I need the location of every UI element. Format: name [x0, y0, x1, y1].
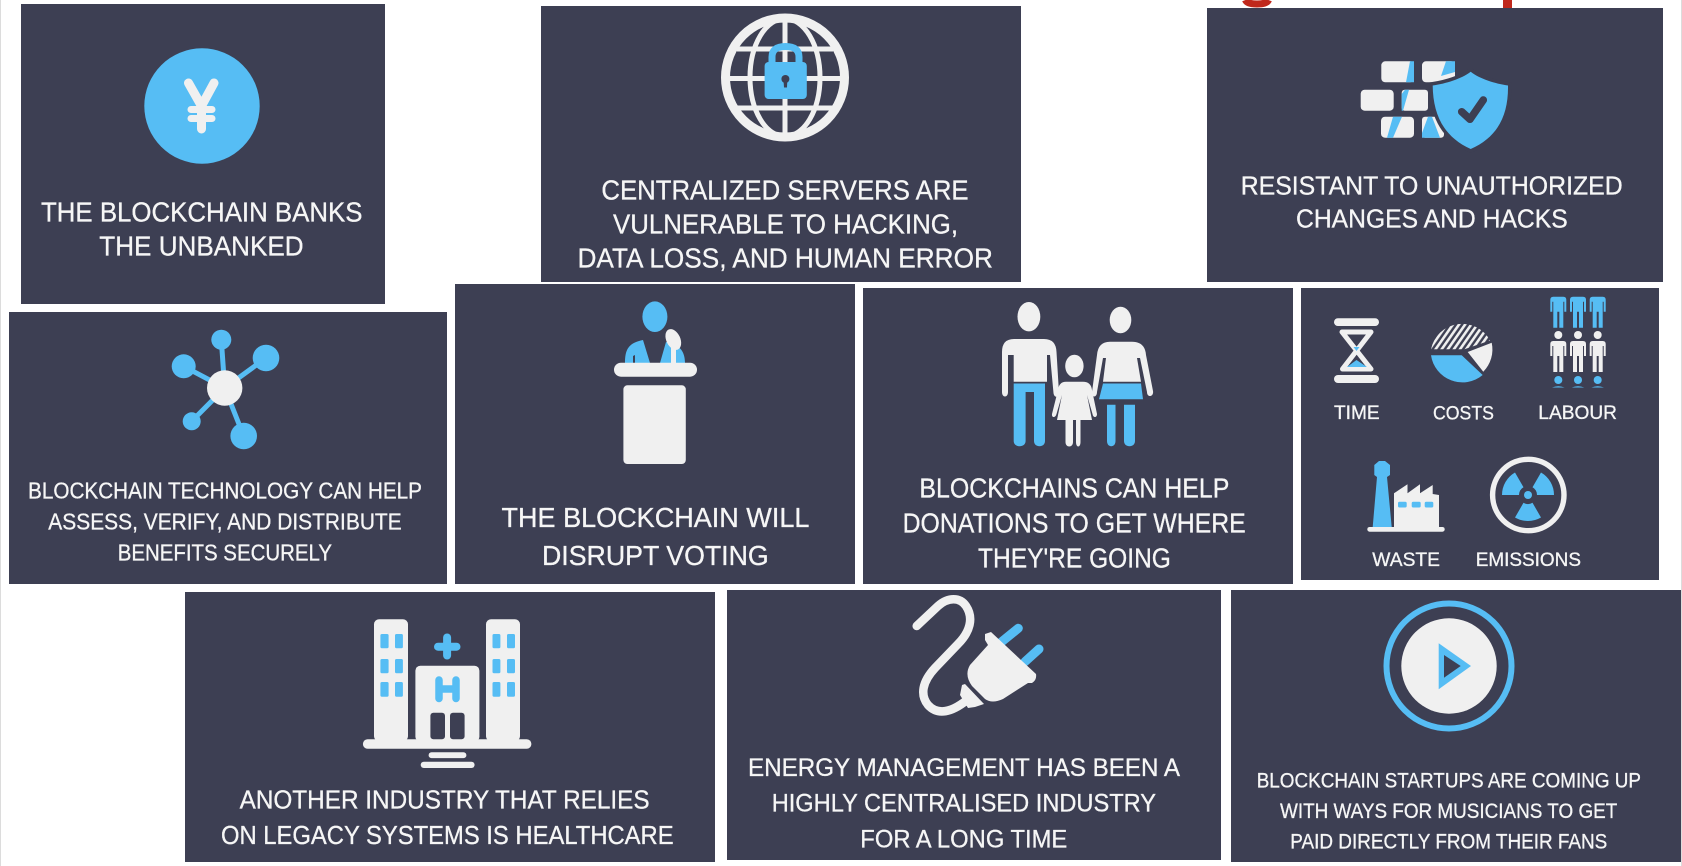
panel: healthcare: [185, 592, 715, 862]
panel: donations: [863, 288, 1293, 584]
icon: hourglass: [1334, 318, 1379, 383]
panel text: THEY'RE GOING: [978, 542, 1171, 573]
icon: workers grid: [1550, 297, 1606, 388]
label: WASTE: WASTE: [1372, 549, 1440, 571]
panel text: BLOCKCHAIN STARTUPS ARE COMING UP: [1257, 768, 1641, 792]
icon: hospital: [363, 619, 531, 768]
icon: brick wall and shield: [1361, 61, 1508, 149]
panel: resistant to changes and hacks: [1207, 8, 1663, 282]
icon: yen coin: [144, 48, 260, 164]
panel text: THE BLOCKCHAIN WILL: [502, 502, 809, 533]
icon: radiation symbol: [1493, 459, 1564, 531]
icon: factory: [1367, 461, 1445, 532]
panel text: WITH WAYS FOR MUSICIANS TO GET: [1280, 799, 1617, 823]
icon: plug and cord: [917, 599, 1039, 711]
panel text: [578, 174, 993, 273]
icon: globe with padlock: [726, 18, 844, 137]
panel text: BLOCKCHAIN TECHNOLOGY CAN HELP: [28, 478, 422, 504]
label: COSTS: COSTS: [1433, 403, 1494, 425]
panel text: [903, 472, 1246, 573]
panel text: FOR A LONG TIME: [860, 825, 1067, 853]
icon: pie chart: [1431, 324, 1492, 382]
panel text: [502, 502, 809, 571]
panel text: [28, 478, 422, 565]
panel text: DISRUPT VOTING: [542, 540, 769, 571]
panel: banks the unbanked: [21, 4, 385, 304]
panel text: [748, 754, 1180, 853]
panel text: PAID DIRECTLY FROM THEIR FANS: [1290, 829, 1607, 853]
panel: disrupt voting: [455, 284, 855, 584]
icon: network hub: [172, 330, 279, 449]
panel text: BENEFITS SECURELY: [118, 539, 332, 565]
panel text: THE UNBANKED: [99, 231, 304, 262]
panel text: CENTRALIZED SERVERS ARE: [601, 174, 969, 205]
panel text: CHANGES AND HACKS: [1296, 203, 1568, 233]
icon: family: [1002, 302, 1153, 446]
panel text: ON LEGACY SYSTEMS IS HEALTHCARE: [221, 820, 674, 850]
panel text: RESISTANT TO UNAUTHORIZED: [1241, 171, 1623, 201]
panel: assess verify distribute: [9, 312, 447, 584]
panel text: [1241, 171, 1623, 233]
panel text: [1257, 768, 1641, 853]
panel text: [41, 197, 362, 262]
panel text: ASSESS, VERIFY, AND DISTRIBUTE: [48, 509, 402, 535]
panel: musicians: [1231, 590, 1681, 862]
label: TIME: TIME: [1334, 402, 1380, 424]
panel: centralized servers: [541, 6, 1021, 282]
panel text: HIGHLY CENTRALISED INDUSTRY: [772, 789, 1156, 817]
panel text: [221, 784, 674, 850]
panel: savings icons: [1301, 288, 1659, 580]
panel text: ANOTHER INDUSTRY THAT RELIES: [240, 784, 650, 814]
panel text: ENERGY MANAGEMENT HAS BEEN A: [748, 754, 1180, 782]
icon: speaker at podium: [614, 301, 697, 464]
label: LABOUR: LABOUR: [1538, 402, 1617, 424]
cropped red heading fragments: [1246, 0, 1512, 8]
panel text: DATA LOSS, AND HUMAN ERROR: [578, 242, 993, 273]
label: EMISSIONS: EMISSIONS: [1476, 549, 1581, 571]
panel text: DONATIONS TO GET WHERE: [903, 507, 1246, 538]
panel text: THE BLOCKCHAIN BANKS: [41, 197, 362, 228]
panel text: VULNERABLE TO HACKING,: [613, 208, 958, 239]
panel: energy management: [727, 590, 1221, 860]
icon: play button: [1386, 604, 1512, 728]
panel text: BLOCKCHAINS CAN HELP: [919, 472, 1229, 503]
